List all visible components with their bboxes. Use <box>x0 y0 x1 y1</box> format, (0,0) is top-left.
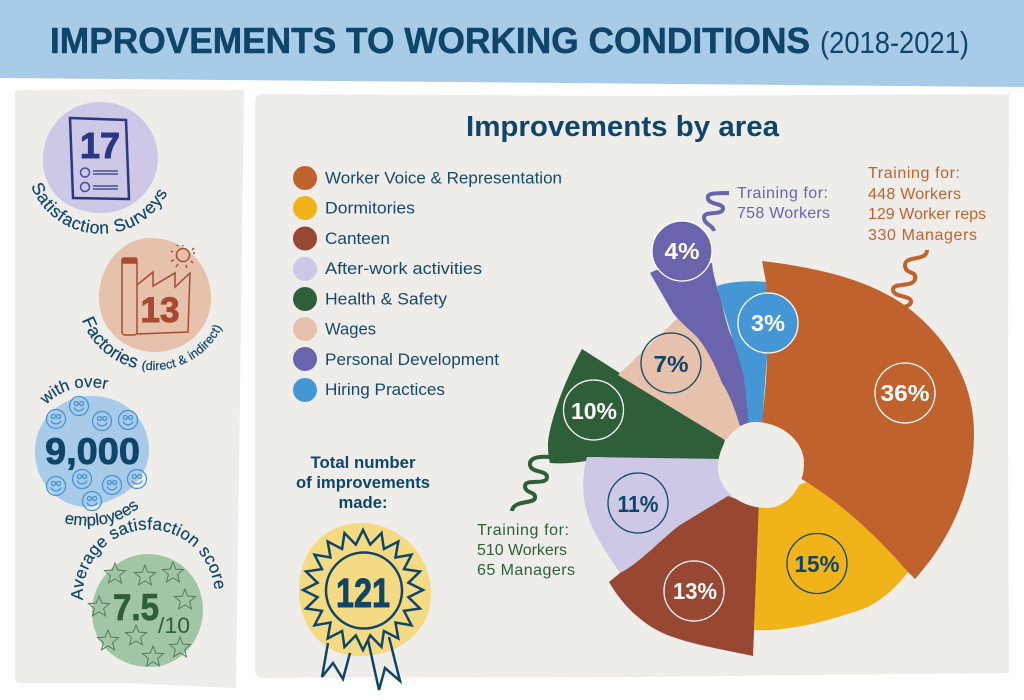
icons: stars <box>88 562 196 666</box>
legend item: canteen: Canteen <box>325 230 390 248</box>
legend item: after-work activities: After-work activities <box>325 260 482 278</box>
label: employees: employees <box>65 502 138 530</box>
slice: wages <box>618 315 745 440</box>
icon: survey document <box>70 118 129 199</box>
text <box>868 165 986 244</box>
label: 3% <box>738 293 798 353</box>
text: Training for: <box>477 522 569 539</box>
exploded pie chart <box>548 221 974 656</box>
legend item: hiring practices: Hiring Practices <box>325 381 445 399</box>
label: 15% <box>787 534 847 594</box>
label: 13% <box>664 561 724 621</box>
slice: after-work activities <box>583 457 732 573</box>
legend item: personal development <box>293 347 499 371</box>
label: with over: with over <box>40 378 108 404</box>
text: Training for: <box>868 165 960 182</box>
legend item: health and safety: Health & Safety <box>325 290 448 308</box>
legend <box>293 166 562 402</box>
slice: dormitories <box>754 482 912 630</box>
label: 4%: 4% <box>664 238 700 264</box>
panel: key figures <box>15 89 244 688</box>
satisfaction surveys figure <box>32 102 166 234</box>
label: Factories (direct & indirect) <box>82 316 223 372</box>
legend item: wages <box>293 317 376 341</box>
label: 36%: 36% <box>880 380 930 406</box>
heading: Improvements by area <box>466 111 780 143</box>
text <box>737 185 830 222</box>
text <box>477 522 575 579</box>
chart centre hole <box>718 422 804 508</box>
text: Training for: <box>737 185 828 202</box>
text: 510 Workers <box>477 542 567 559</box>
label: 11%: 11% <box>618 491 658 517</box>
squiggle connector <box>893 250 927 307</box>
label: 3%: 3% <box>751 310 785 336</box>
total improvements caption: Total number <box>310 454 416 472</box>
number 121: 121 <box>336 570 390 616</box>
text: 758 Workers <box>737 205 830 222</box>
blob <box>92 554 203 667</box>
label: 7% <box>641 333 701 393</box>
text: 65 Managers <box>477 562 575 579</box>
squiggle connector <box>512 457 550 511</box>
number 17: 17 <box>80 125 120 166</box>
label: 4% <box>652 221 712 281</box>
inner circle <box>326 552 402 628</box>
starburst <box>303 530 423 650</box>
number 13: 13 <box>141 291 179 330</box>
blob <box>299 523 431 656</box>
legend item: dormitories <box>293 196 415 220</box>
icons: smiley faces <box>46 396 146 510</box>
total improvements caption: of improvements <box>296 474 430 492</box>
score denominator: /10 <box>158 613 190 638</box>
number 9,000: 9,000 <box>45 431 140 472</box>
panel: improvements by area <box>255 94 1009 690</box>
squiggle connector <box>704 193 729 231</box>
blob <box>99 238 211 352</box>
blob <box>43 102 158 213</box>
icon: factory <box>122 245 195 335</box>
text: 330 Managers <box>868 227 977 244</box>
blob <box>35 396 149 507</box>
slice: canteen <box>609 496 762 656</box>
title: IMPROVEMENTS TO WORKING CONDITIONS <box>50 20 810 61</box>
legend item: worker voice <box>293 166 562 190</box>
label: 10%: 10% <box>571 398 617 424</box>
rosette badge: 121 <box>299 523 431 690</box>
label: 15%: 15% <box>794 551 840 577</box>
total improvements caption: made: <box>338 494 388 512</box>
callout: worker voice training <box>868 165 986 307</box>
ribbons <box>322 637 400 690</box>
legend item: canteen <box>293 226 390 250</box>
title years: (2018-2021) <box>820 25 969 60</box>
label: 13%: 13% <box>673 578 717 604</box>
header band <box>0 0 1024 87</box>
slice: personal development <box>650 263 750 426</box>
text: 448 Workers <box>868 186 961 203</box>
callout: health and safety training <box>477 457 575 579</box>
text: 129 Worker reps <box>868 206 986 223</box>
slice: worker voice <box>762 261 974 579</box>
total improvements caption <box>296 454 430 512</box>
label: Satisfaction Surveys <box>32 182 166 234</box>
label: Average satisfaction score <box>71 517 224 600</box>
satisfaction score figure <box>71 517 224 667</box>
slice: health and safety <box>548 349 725 463</box>
factories figure <box>82 238 223 372</box>
legend item: worker voice: Worker Voice & Representation <box>325 170 562 188</box>
legend item: wages: Wages <box>325 321 376 339</box>
label: 11% <box>608 473 668 533</box>
legend item: personal development: Personal Development <box>325 351 499 369</box>
legend item: dormitories: Dormitories <box>325 200 415 218</box>
legend item: hiring practices <box>293 378 445 402</box>
label: 36% <box>875 363 935 423</box>
slice: hiring practices <box>717 281 767 424</box>
callout: personal development training <box>704 185 830 231</box>
legend item: health and safety <box>293 287 448 311</box>
legend item: after-work activities <box>293 257 482 281</box>
label: 10% <box>564 380 624 440</box>
score: 7.5 <box>113 587 159 628</box>
employees figure <box>35 378 149 530</box>
label: 7%: 7% <box>654 351 688 377</box>
